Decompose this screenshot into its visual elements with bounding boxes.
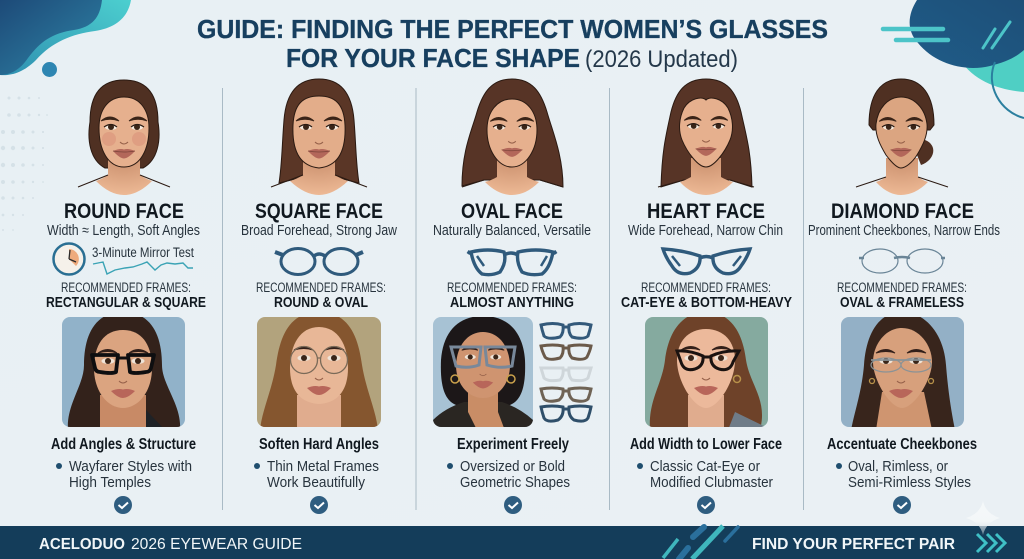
descriptor: Broad Forehead, Strong Jaw — [241, 223, 397, 239]
footer brand: ACELODUO — [39, 536, 125, 553]
bullet text: Modified Clubmaster — [650, 474, 773, 491]
recommended label: RECOMMENDED FRAMES: — [61, 280, 191, 295]
frame type: ROUND & OVAL — [274, 294, 368, 311]
title — [197, 14, 828, 73]
heading: round face: ROUND FACE — [64, 200, 184, 223]
bullet text: Classic Cat-Eye or — [650, 458, 760, 475]
icon: clock — [54, 244, 84, 274]
descriptor: Wide Forehead, Narrow Chin — [628, 223, 783, 239]
icon: check — [310, 496, 328, 514]
bullet text: Geometric Shapes — [460, 474, 570, 491]
bullet text: High Temples — [69, 474, 151, 491]
icon: sparkle — [966, 501, 1000, 535]
descriptor: Naturally Balanced, Versatile — [433, 223, 591, 239]
heading: square face: SQUARE FACE — [255, 200, 383, 223]
icon: cat-eye glasses — [663, 249, 750, 274]
footer call to action: FIND YOUR PERFECT PAIR — [752, 536, 955, 553]
diamond face illustration — [856, 79, 948, 195]
chart: mirror test line — [93, 262, 193, 274]
decorative blob: top right — [883, 0, 1024, 118]
bullet text — [447, 458, 570, 491]
title: FOR YOUR FACE SHAPE — [286, 43, 580, 73]
oval face illustration — [462, 79, 563, 195]
recommended label: RECOMMENDED FRAMES: — [641, 280, 771, 295]
bullet text: Thin Metal Frames — [267, 458, 379, 475]
descriptor: Width ≈ Length, Soft Angles — [47, 223, 200, 239]
round face illustration — [78, 80, 170, 195]
portrait: square face with round metal glasses — [257, 312, 381, 430]
footer brand: 2026 EYEWEAR GUIDE — [131, 536, 302, 553]
mirror test label: 3-Minute Mirror Test — [92, 245, 194, 260]
portrait: round face with rectangular glasses — [62, 312, 185, 430]
title: GUIDE: FINDING THE PERFECT WOMEN’S GLASSES — [197, 14, 828, 44]
icon: check — [697, 496, 715, 514]
panel: round face — [46, 80, 206, 514]
icon: chevrons — [977, 534, 1005, 552]
tip heading: Experiment Freely — [457, 436, 569, 453]
heading: oval face: OVAL FACE — [461, 200, 563, 223]
tip heading: Soften Hard Angles — [259, 436, 379, 453]
bullet text: Semi-Rimless Styles — [848, 474, 971, 491]
icon: bold square glasses — [468, 250, 556, 275]
panel: square face — [241, 79, 397, 514]
panel: oval face — [433, 79, 591, 514]
tip heading: Accentuate Cheekbones — [827, 436, 977, 453]
bullet text: Wayfarer Styles with — [69, 458, 192, 475]
bullet text: Oval, Rimless, or — [848, 458, 948, 475]
recommended label: RECOMMENDED FRAMES: — [447, 280, 577, 295]
title: (2026 Updated) — [585, 46, 738, 73]
frame type: RECTANGULAR & SQUARE — [46, 294, 206, 311]
bullet text: Oversized or Bold — [460, 458, 565, 475]
icon: round glasses — [275, 248, 363, 274]
heart face illustration — [658, 79, 754, 195]
frame type: OVAL & FRAMELESS — [840, 294, 964, 311]
decorative blob: top left — [0, 0, 131, 77]
icon: check — [504, 496, 522, 514]
recommended label: RECOMMENDED FRAMES: — [256, 280, 386, 295]
bullet text — [637, 458, 773, 491]
tip heading: Add Angles & Structure — [51, 436, 196, 453]
frame options: five small glasses — [541, 324, 591, 421]
tip heading: Add Width to Lower Face — [630, 436, 782, 453]
portrait: diamond face with rimless glasses — [841, 312, 964, 430]
portrait: heart face with cat-eye glasses — [645, 312, 772, 430]
panel: heart face — [621, 79, 792, 514]
icon: check — [114, 496, 132, 514]
icon: rimless glasses — [859, 249, 945, 273]
bullet text — [254, 458, 379, 491]
icon: check — [893, 496, 911, 514]
footer bar — [0, 526, 1024, 559]
bullet text — [56, 458, 192, 491]
recommended label: RECOMMENDED FRAMES: — [837, 280, 967, 295]
panel: diamond face — [808, 79, 1000, 514]
heading: heart face: HEART FACE — [647, 200, 765, 223]
frame type: CAT-EYE & BOTTOM-HEAVY — [621, 294, 792, 311]
frame type: ALMOST ANYTHING — [450, 294, 574, 311]
square face illustration — [271, 79, 367, 195]
heading: diamond face: DIAMOND FACE — [831, 200, 974, 223]
portrait: oval face with bold geometric glasses — [433, 316, 533, 428]
bullet text: Work Beautifully — [267, 474, 365, 491]
bullet text — [836, 458, 971, 491]
